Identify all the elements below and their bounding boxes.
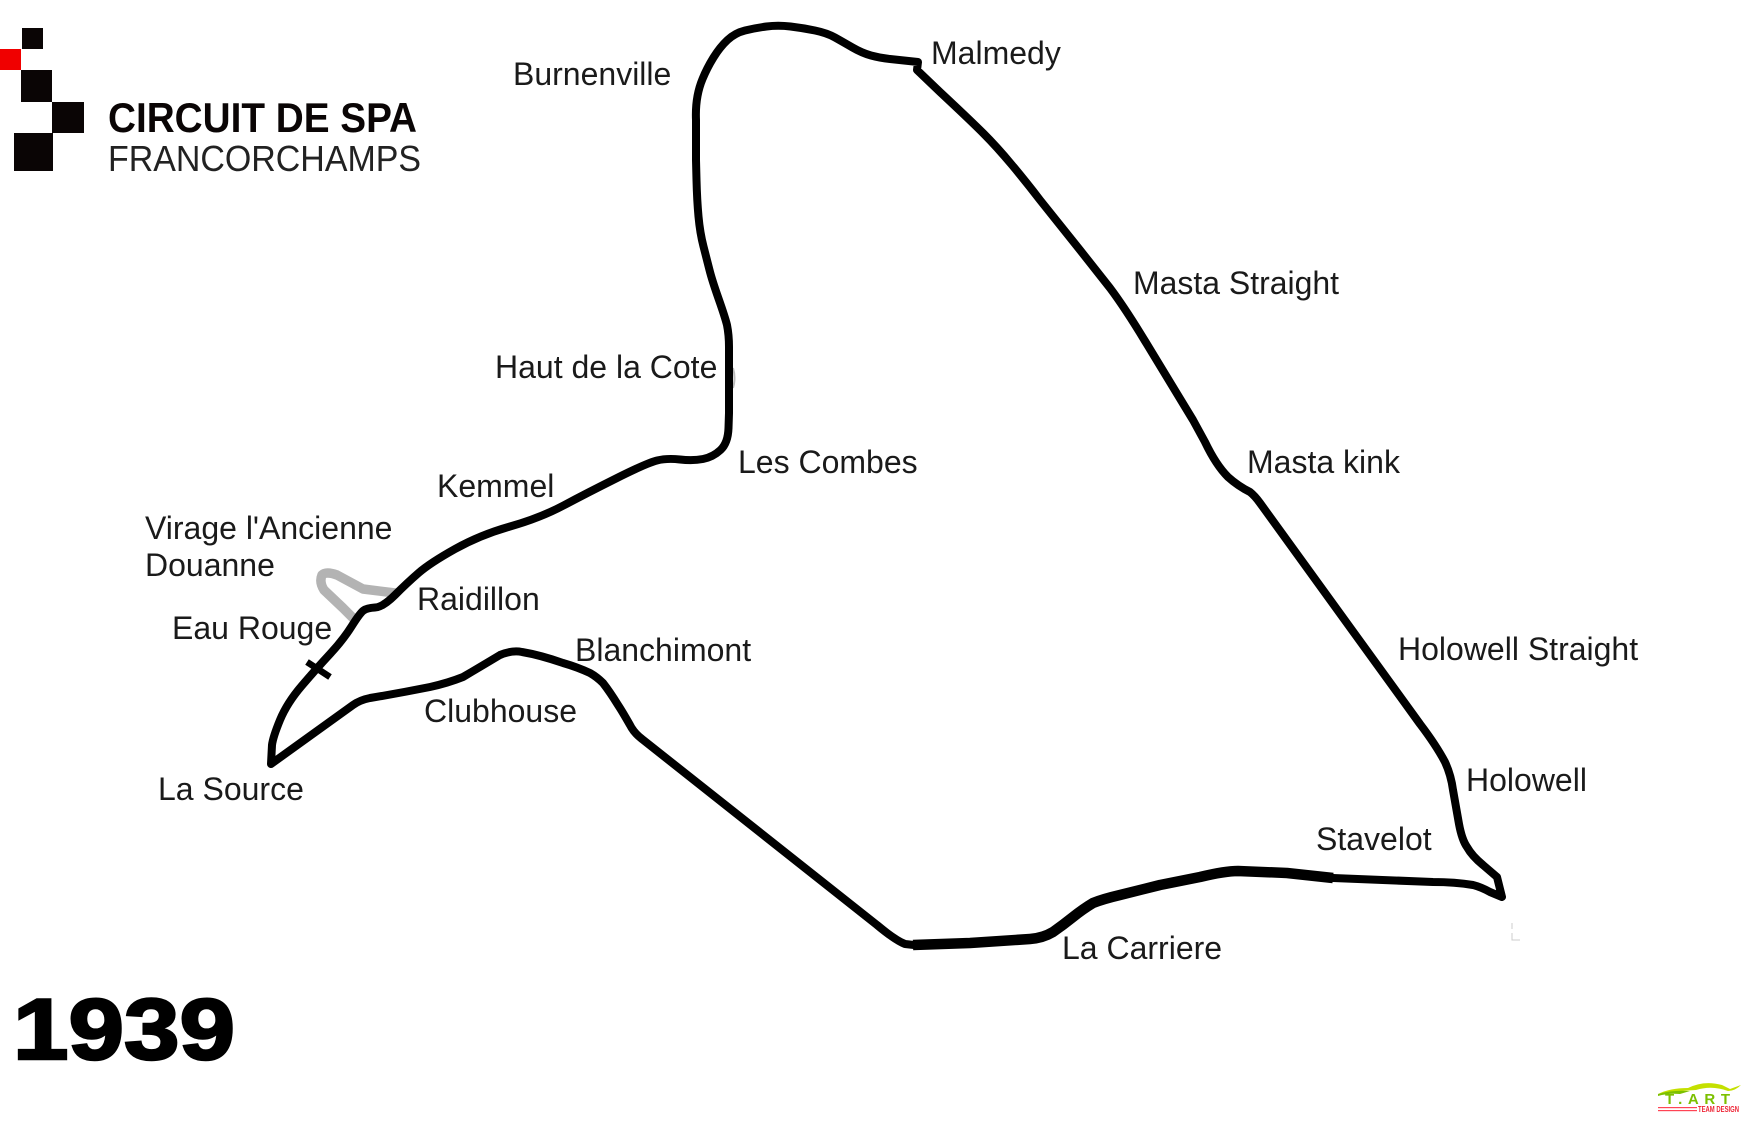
logo: Circuit de Spa Francorchamps bbox=[0, 28, 421, 179]
label: Burnenville: Burnenville bbox=[513, 56, 671, 92]
label: La Source: La Source bbox=[158, 771, 304, 807]
red lines bbox=[1658, 1107, 1697, 1111]
old track section: Virage l'Ancienne Douanne bbox=[321, 573, 395, 619]
track map bbox=[271, 26, 1502, 945]
label: Blanchimont: Blanchimont bbox=[575, 632, 751, 668]
label: Masta kink: Masta kink bbox=[1247, 444, 1401, 480]
start finish line bbox=[307, 662, 330, 677]
circuit outline bbox=[271, 26, 1502, 945]
label: Malmedy: Malmedy bbox=[931, 35, 1061, 71]
corner labels bbox=[145, 35, 1638, 966]
logo letters: T.ART bbox=[1665, 1091, 1730, 1108]
logo: T.ART Team Design bbox=[1658, 1083, 1741, 1114]
icon: car swoosh bbox=[1658, 1083, 1741, 1096]
label: Kemmel: Kemmel bbox=[437, 468, 554, 504]
label: Masta Straight: Masta Straight bbox=[1133, 265, 1339, 301]
label: Eau Rouge: Eau Rouge bbox=[172, 610, 332, 646]
label: Virage l'Ancienne Douanne bbox=[145, 510, 392, 583]
label: Clubhouse: Clubhouse bbox=[424, 693, 577, 729]
label: Stavelot: Stavelot bbox=[1316, 821, 1432, 857]
label: Les Combes: Les Combes bbox=[738, 444, 918, 480]
label: Virage l'Ancienne Douanne: Virage l'Ancienne bbox=[145, 510, 392, 546]
label: Haut de la Cote: Haut de la Cote bbox=[495, 349, 717, 385]
label: Raidillon: Raidillon bbox=[417, 581, 540, 617]
label: Holowell: Holowell bbox=[1466, 762, 1587, 798]
label: Holowell Straight: Holowell Straight bbox=[1398, 631, 1638, 667]
logo text: Circuit de Spa: CIRCUIT DE SPA bbox=[108, 94, 417, 141]
year: 1939: 1939 bbox=[13, 982, 235, 1078]
label: La Carriere: La Carriere bbox=[1062, 930, 1222, 966]
label: Virage l'Ancienne Douanne: Douanne bbox=[145, 547, 275, 583]
logo text: Francorchamps: FRANCORCHAMPS bbox=[108, 138, 421, 179]
icon: chequered squares bbox=[0, 28, 84, 171]
